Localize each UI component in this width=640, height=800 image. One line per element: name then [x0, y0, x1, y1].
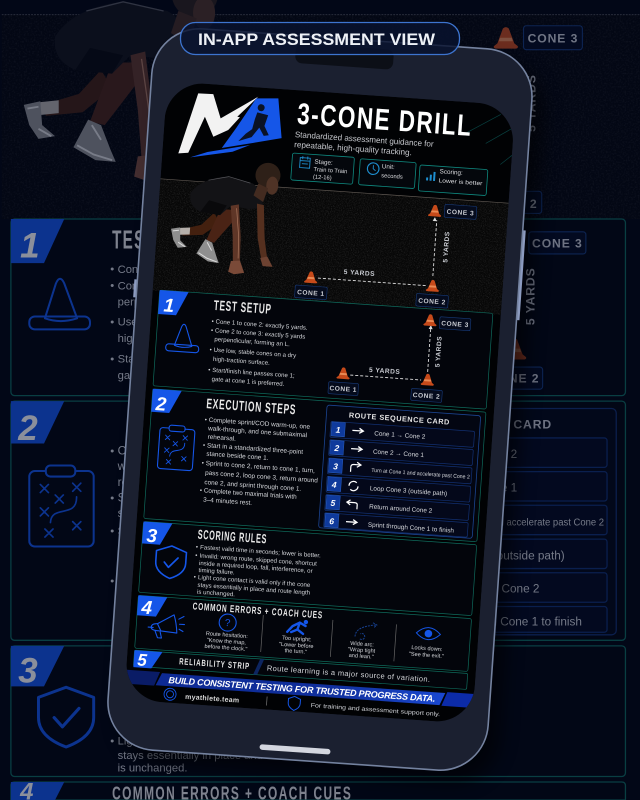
badge 5: 5 — [137, 650, 148, 670]
execution bullets — [200, 418, 318, 505]
scoring bullets: inside a required loop, fall, interference, or — [199, 560, 313, 575]
drill diagram — [295, 194, 477, 310]
background poster: CONE 2 — [487, 197, 538, 211]
execution bullets: stance beside cone 1. — [206, 451, 269, 462]
route card title: ROUTE SEQUENCE CARD — [349, 411, 450, 427]
footer site: myathlete.team — [185, 694, 239, 705]
background poster: 5 YARDS — [524, 74, 538, 132]
badge 1 — [158, 290, 189, 318]
cue: wide arc — [347, 621, 378, 661]
footer divider — [265, 697, 268, 706]
drill diagram: CONE 2 — [418, 298, 446, 307]
execution bullets: Start in a standardized three-point — [207, 442, 303, 456]
badge 3 — [142, 522, 172, 545]
stat: stage: (12-16) — [313, 174, 332, 182]
call-to-action banner: BUILD CONSISTENT TESTING FOR TRUSTED PROGRESS DATA. — [168, 675, 436, 704]
background poster: • — [110, 445, 114, 457]
cue: route hesitation: ? — [224, 618, 231, 629]
cue: route hesitation: Route hesitation: — [206, 631, 248, 640]
background poster: Sprint to cone 2, return to cone 1, turn, — [118, 525, 310, 537]
execution bullets: • — [200, 487, 202, 494]
execution bullets: rehearsal. — [207, 434, 236, 443]
scoring bullets: timing failure. — [198, 567, 235, 576]
background poster: 2 — [17, 409, 38, 448]
icon: shield — [155, 545, 187, 579]
background poster: Start in a standardized three-point — [118, 492, 296, 505]
background poster: Use low, stable cones on a dry — [118, 316, 270, 328]
step 6: 6 — [329, 516, 335, 526]
background poster: gate at cone 1 is preferred. — [118, 370, 252, 382]
mini cone diagram: 5 YARDS — [369, 367, 401, 376]
step 1: Cone 1 → Cone 2 — [374, 430, 426, 441]
background poster: Complete sprint/COD warm-up, one — [118, 444, 305, 457]
phone screen poster — [124, 81, 515, 724]
badge 5 — [133, 650, 162, 671]
background poster: CONE 2 — [489, 372, 539, 386]
execution bullets: 3–4 minutes rest. — [203, 497, 253, 507]
step 4: 4 — [331, 479, 337, 490]
mini cone diagram: CONE 2 — [412, 392, 440, 401]
logo — [178, 93, 282, 158]
setup bullets — [207, 318, 308, 389]
setup bullets: gate at cone 1 is preferred. — [211, 376, 285, 388]
badge 3: 3 — [146, 526, 158, 547]
screen background — [124, 81, 515, 724]
subtitle: Standardized assessment guidance for — [295, 130, 434, 149]
step 1 — [330, 421, 475, 447]
subtitle — [294, 132, 434, 157]
stat: scoring: Scoring: — [439, 168, 463, 177]
scoring bullets: • — [194, 574, 196, 581]
phone side buttons — [133, 203, 526, 324]
icon: cone — [165, 323, 200, 353]
drill diagram: CONE 1 — [297, 289, 325, 298]
phone body — [105, 26, 535, 773]
background poster: Sprint through Cone 1 to finish — [423, 616, 582, 629]
cue: wide arc: "Wrap tight — [348, 647, 376, 655]
scoring bullets: Invalid: wrong route, skipped cone, shortcut — [199, 552, 317, 568]
background poster: 3 — [18, 652, 38, 691]
heading: common errors: COMMON ERRORS + COACH CUES — [192, 601, 323, 622]
field background — [153, 179, 509, 315]
step 2: 2 — [333, 443, 340, 453]
panel 2: execution steps — [144, 389, 486, 542]
execution bullets: pass cone 2, loop cone 3, return around — [205, 470, 318, 485]
scoring bullets: Light cone contact is valid only if the cone — [198, 574, 311, 589]
background poster: Start/finish line passes cone 1; — [118, 353, 270, 365]
background poster: • — [110, 280, 114, 292]
stat: unit: seconds — [381, 173, 403, 181]
execution bullets: walk-through, and one submaximal — [207, 425, 307, 439]
background poster: Cone 1 → Cone 2 — [423, 448, 517, 461]
scoring bullets — [194, 545, 320, 597]
cue: too upright: the turn." — [284, 648, 307, 656]
execution bullets: • — [203, 442, 205, 449]
icon: megaphone — [147, 613, 185, 640]
step 5: 5 — [330, 498, 336, 508]
background poster: Turn at Cone 1 and accelerate past Cone 2 — [422, 517, 604, 528]
setup bullets: Start/finish line passes cone 1; — [212, 367, 295, 380]
drill diagram: 5 YARDS — [442, 231, 452, 263]
background poster: • — [110, 576, 114, 588]
reliability text: Route learning is a major source of variation. — [267, 663, 430, 684]
step 6: Sprint through Cone 1 to finish — [368, 522, 455, 535]
setup bullets: • — [208, 367, 211, 374]
background poster: • — [110, 493, 114, 505]
stat: scoring — [418, 165, 488, 196]
phone mockup — [102, 25, 538, 774]
drill diagram: CONE 3 — [446, 209, 474, 218]
background poster: Cone 2 to cone 3: exactly 5 yards — [118, 281, 284, 293]
step 4 — [326, 476, 471, 502]
cue: locks down: Locks down: — [411, 645, 443, 653]
background poster: Cone 1 to cone 2: exactly 5 yards. — [118, 264, 287, 276]
background poster: • — [110, 353, 114, 365]
heading: scoring rules: SCORING RULES — [197, 527, 268, 546]
heading: reliability strip: RELIABILITY STRIP — [179, 656, 250, 671]
icon: footer shield — [288, 696, 301, 711]
setup bullets: perpendicular, forming an L. — [214, 336, 290, 348]
panel 5: reliability strip — [133, 650, 468, 692]
cue: route hesitation — [204, 613, 250, 653]
step 4: Loop Cone 3 (outside path) — [370, 485, 447, 498]
title: 3-CONE DRILL — [296, 98, 474, 143]
step 3: 3 — [333, 461, 339, 472]
background poster: CONE 3 — [528, 31, 578, 45]
badge 2: 2 — [154, 394, 167, 416]
mini cone diagram: 5 YARDS — [435, 336, 444, 368]
home indicator — [259, 744, 331, 755]
execution bullets: Sprint to cone 2, return to cone 1, turn, — [205, 460, 315, 475]
step 6 — [324, 513, 468, 537]
icon: globe — [164, 688, 176, 701]
background poster: Loop Cone 3 (outside path) — [422, 549, 565, 562]
stat: stage — [291, 153, 354, 184]
heading: test setup: TEST SETUP — [213, 297, 272, 317]
execution bullets: cone 2, and sprint through cone 1. — [204, 479, 302, 493]
panel 3: scoring rules — [139, 521, 477, 616]
panel 4: common errors and coach cues — [135, 595, 472, 671]
scoring bullets: • — [196, 544, 198, 551]
corner streaks — [466, 114, 512, 165]
panel 1: test setup — [153, 290, 493, 409]
background poster: • — [110, 316, 114, 328]
execution bullets: • — [205, 417, 207, 424]
cue: wide arc: and lean." — [348, 653, 374, 661]
step 2 — [329, 440, 473, 466]
step 3 — [327, 458, 472, 484]
background poster: stance beside cone 1. — [118, 507, 232, 520]
drill diagram: 5 YARDS — [343, 269, 375, 278]
badge 4: 4 — [140, 598, 153, 619]
badge 4 — [137, 595, 168, 617]
phone speaker notch — [295, 43, 394, 70]
background poster: is unchanged. — [118, 763, 187, 775]
setup bullets: • — [211, 318, 214, 325]
background poster: Cone 2 → Cone 1 — [423, 481, 517, 494]
background poster: stays essentially in place and route length — [118, 750, 325, 762]
badge 2 — [151, 388, 182, 413]
scoring bullets: Fastest valid time in seconds; lower is better. — [200, 544, 321, 560]
scoring bullets: stays essentially in place and route length — [197, 582, 310, 597]
cue: locks down — [409, 626, 446, 660]
background poster: ROUTE SEQUENCE CARD — [382, 418, 552, 432]
cue: too upright: "Lower before — [279, 642, 314, 650]
background poster: • — [110, 525, 114, 537]
cue: locks down: "See the exit." — [409, 652, 444, 660]
scoring bullets: • — [195, 552, 198, 559]
stat: stage: Stage: — [314, 159, 333, 167]
execution bullets: Complete two maximal trials with — [204, 487, 297, 501]
step 1: 1 — [335, 425, 341, 435]
execution bullets: • — [201, 460, 204, 467]
route sequence card — [319, 405, 481, 538]
phone shadow — [116, 39, 547, 787]
step 5 — [325, 494, 470, 520]
background poster: perpendicular, forming an L. — [118, 296, 257, 308]
background poster: • — [110, 736, 114, 748]
stat: unit: Unit: — [382, 163, 395, 171]
background poster: 5 YARDS — [346, 155, 404, 169]
cue: too upright — [278, 618, 315, 656]
background poster: TEST SETUP — [112, 226, 219, 254]
cue: route hesitation: before the clock." — [204, 644, 248, 653]
cue: too upright: Too upright: — [282, 635, 312, 644]
background poster: Light cone contact is valid only if the cone — [118, 736, 325, 748]
label pill: in-app assessment view — [180, 22, 460, 54]
setup bullets: • — [209, 346, 212, 354]
background poster: CONE 3 — [532, 236, 583, 250]
step 2: Cone 2 → Cone 1 — [373, 449, 425, 459]
mini cone diagram — [328, 307, 471, 404]
background poster: 5 YARDS — [523, 267, 537, 325]
call-to-action banner — [125, 670, 474, 708]
mini cone diagram: CONE 1 — [329, 385, 357, 394]
background poster: 1 — [20, 227, 40, 266]
badge 1: 1 — [163, 295, 175, 317]
strip divider — [253, 659, 264, 675]
stat: stage: Train to Train — [313, 167, 348, 175]
setup bullets: Cone 1 to cone 2: exactly 5 yards. — [215, 318, 308, 332]
background poster: • — [110, 263, 114, 275]
cue: wide arc: Wide arc: — [350, 641, 374, 649]
background poster: walk-through, and one submaximal — [117, 460, 300, 473]
athlete — [171, 162, 280, 274]
stat: scoring: Lower is better — [438, 178, 483, 187]
icon: clipboard — [157, 424, 195, 471]
background poster: high-traction surface. — [118, 333, 222, 345]
background poster: Return around Cone 2 — [423, 582, 539, 595]
footer note: For training and assessment support only. — [311, 703, 441, 718]
subtitle: repeatable, high-quality tracking. — [294, 140, 412, 157]
execution bullets: Complete sprint/COD warm-up, one — [208, 417, 311, 431]
setup bullets: high-traction surface. — [213, 356, 270, 367]
mini cone diagram: CONE 3 — [441, 320, 469, 329]
heading: execution steps: EXECUTION STEPS — [206, 395, 297, 417]
setup bullets: Cone 2 to cone 3: exactly 5 yards — [215, 327, 305, 341]
background poster: rehearsal. — [118, 476, 170, 489]
step 3: Turn at Cone 1 and accelerate past Cone 2 — [371, 468, 470, 481]
footer — [164, 687, 441, 721]
setup bullets: • — [211, 327, 213, 334]
stat: unit — [359, 159, 416, 189]
dividers — [261, 615, 396, 661]
cue: route hesitation: "Know the map, — [206, 638, 247, 646]
scoring bullets: is unchanged. — [197, 589, 235, 598]
setup bullets: Use low, stable cones on a dry — [213, 347, 297, 360]
step 5: Return around Cone 2 — [369, 503, 433, 515]
background poster: CONE 1 — [263, 197, 314, 211]
label pill: in-app assessment view: IN-APP ASSESSMENT VIEW — [198, 30, 436, 49]
